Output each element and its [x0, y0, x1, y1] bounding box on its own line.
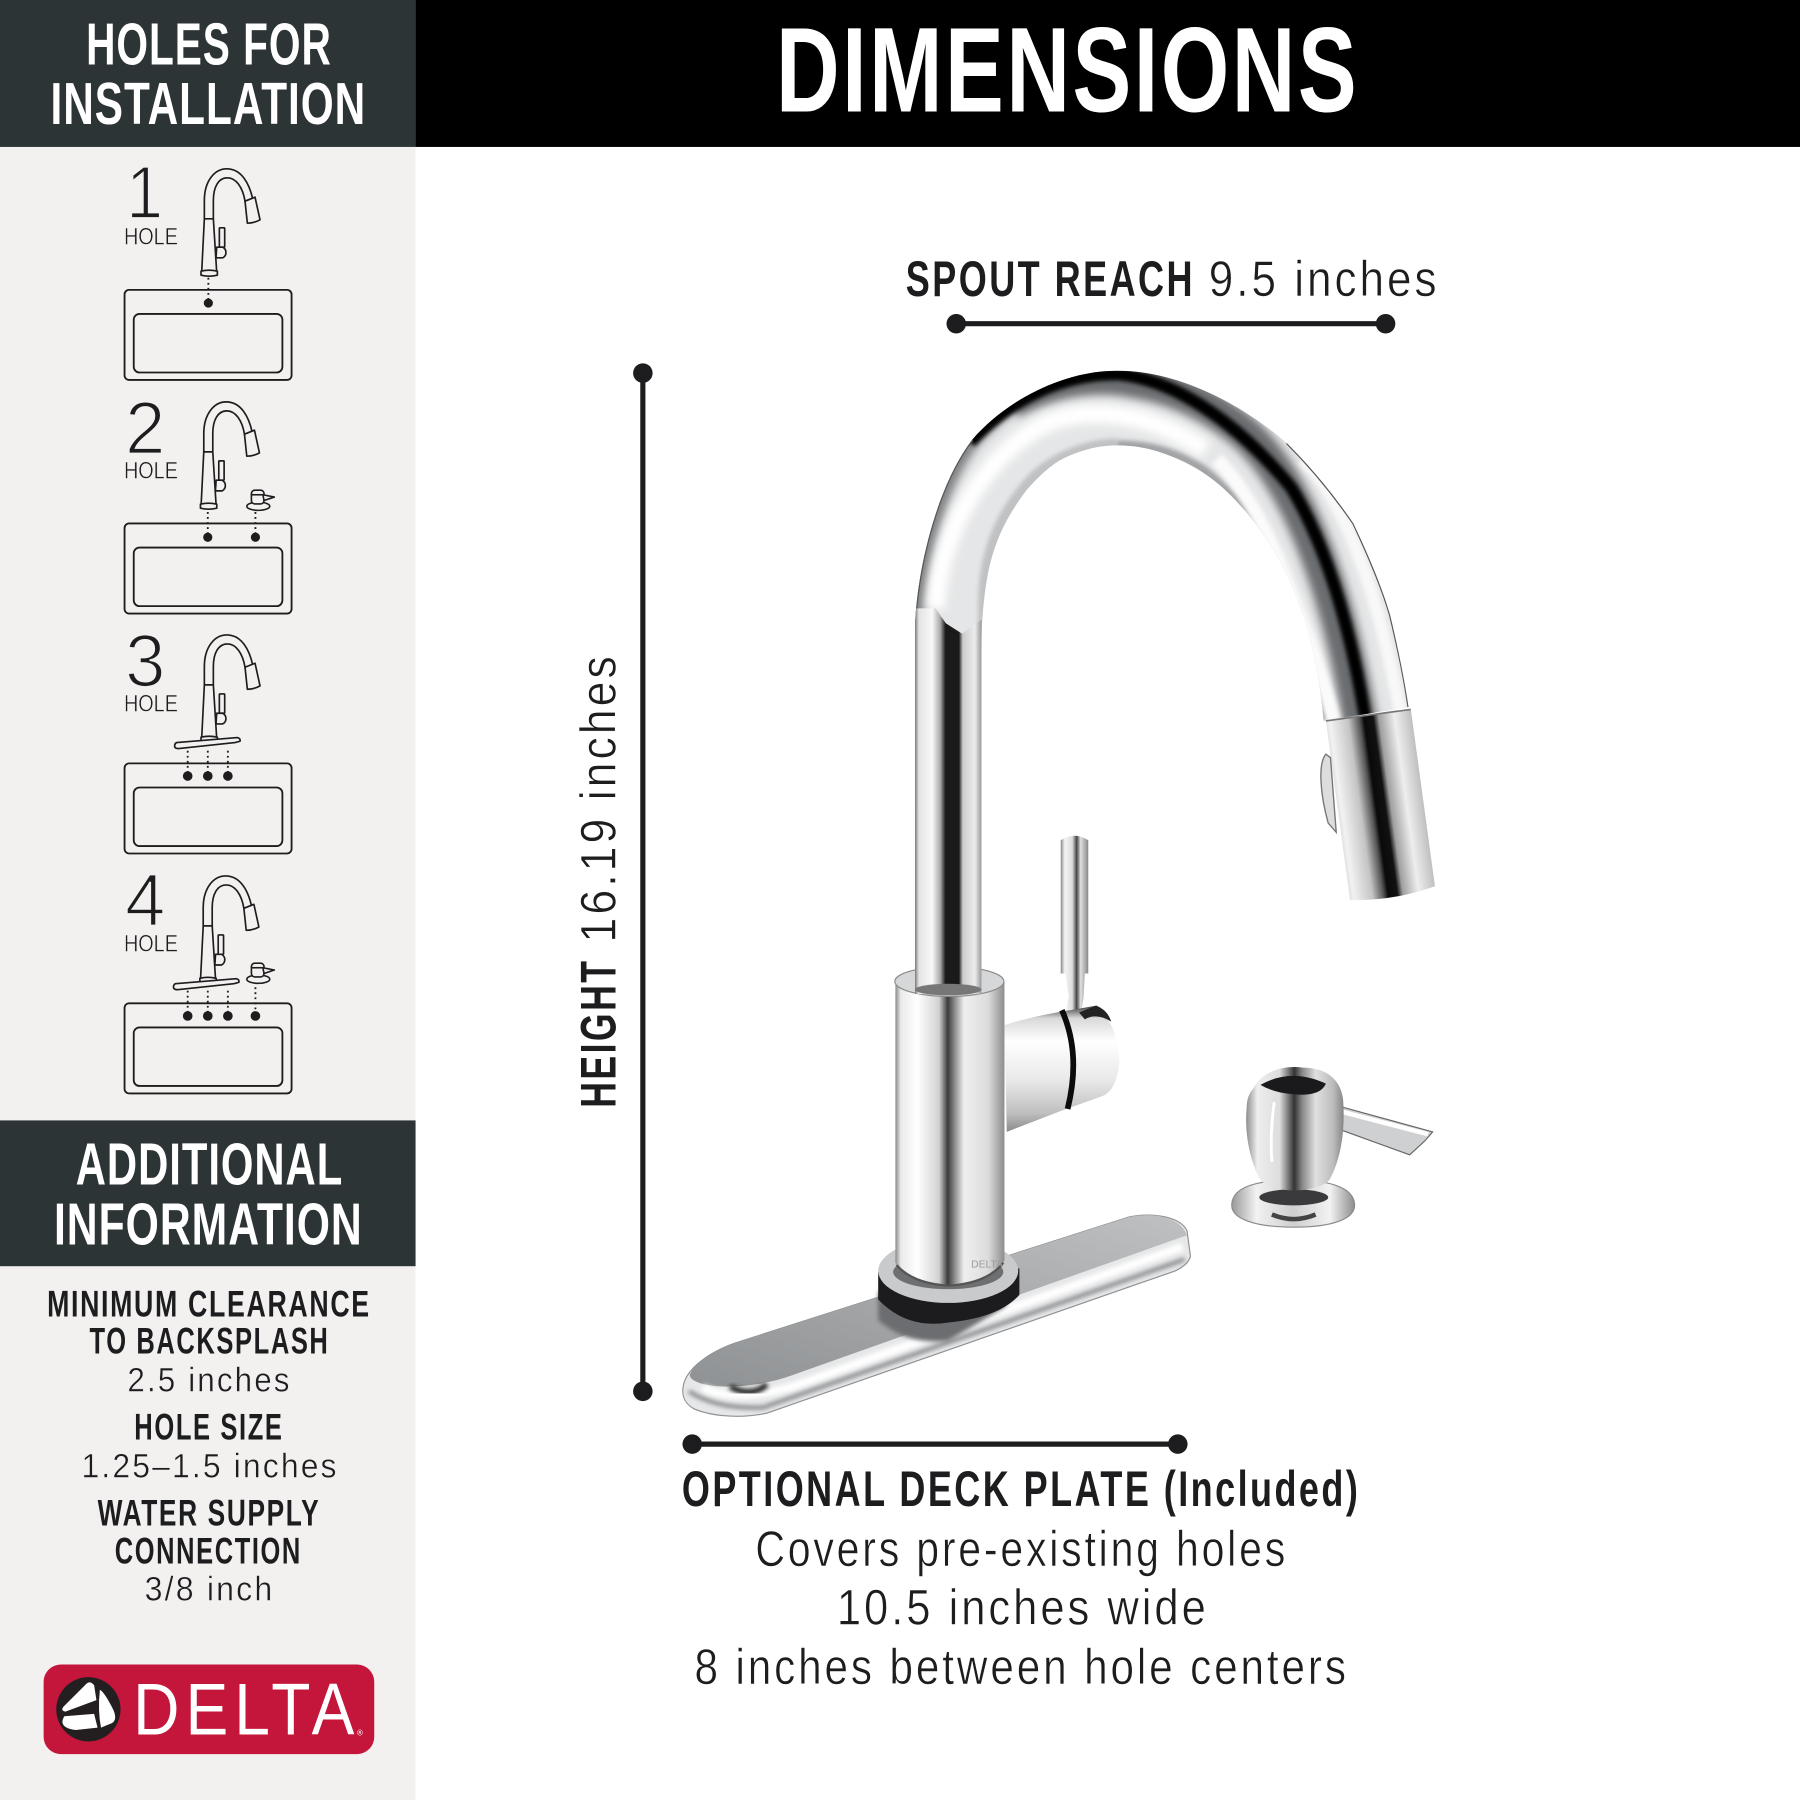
text: minimum clearance: 2.5 inches — [127, 1361, 292, 1399]
text: hole size — [82, 1407, 339, 1485]
logo: delta: DELTA — [133, 1668, 360, 1751]
diagram: 2 hole — [124, 385, 292, 614]
dimension: spout reach: SPOUT REACH — [906, 250, 1195, 307]
text: water supply connection — [98, 1493, 320, 1608]
diagram: 1 hole — [124, 150, 292, 380]
photo: chrome faucet body — [895, 967, 1004, 1286]
text: optional deck plate — [682, 1460, 1360, 1695]
dimension: height: 16.19 inches — [569, 653, 626, 942]
heading: holes for installation — [0, 0, 416, 147]
text: optional deck plate: Covers pre-existing holes — [755, 1520, 1288, 1577]
photo: chrome spout neck — [907, 356, 1418, 999]
diagram: 3 hole: 3 — [125, 618, 165, 702]
photo: spout neck base — [915, 984, 982, 995]
heading: holes for installation: HOLES FOR — [86, 10, 332, 77]
diagram: 4 hole: 4 — [125, 857, 165, 941]
diagram: 3 hole: HOLE — [124, 691, 178, 718]
dimension: height — [569, 363, 653, 1401]
photo: chrome deck plate — [683, 1215, 1190, 1416]
panel: sidebar — [0, 0, 416, 1800]
title: dimensions: DIMENSIONS — [776, 2, 1359, 137]
diagram: 4 hole: HOLE — [124, 931, 178, 958]
header bar: dimensions — [416, 0, 1800, 147]
diagram: 2 hole: 2 — [125, 385, 165, 469]
heading: additional information — [0, 1120, 416, 1266]
photo: pull-down spray head — [1321, 709, 1435, 900]
diagram: 1 hole: HOLE — [124, 224, 178, 251]
photo: lever handle — [1004, 836, 1119, 1132]
text: water supply connection: CONNECTION — [115, 1531, 302, 1572]
text: minimum clearance: MINIMUM CLEARANCE — [47, 1284, 371, 1325]
text: hole size: 1.25–1.5 inches — [82, 1447, 339, 1485]
text: minimum clearance — [47, 1284, 371, 1399]
text: water supply connection: 3/8 inch — [145, 1570, 274, 1608]
heading: holes for installation: INSTALLATION — [51, 70, 366, 137]
diagram: 4 hole — [124, 857, 292, 1093]
diagram: 3 hole — [124, 618, 292, 854]
heading: additional information: INFORMATION — [54, 1190, 363, 1257]
text: water supply connection: WATER SUPPLY — [98, 1493, 320, 1534]
photo: chrome faucet base ring — [878, 1239, 1019, 1324]
photo: chrome faucet body: DELTA — [971, 1259, 1003, 1270]
logo: delta: ® — [357, 1729, 363, 1738]
dimension: deck plate — [682, 1434, 1188, 1454]
dimension: height: HEIGHT — [569, 959, 626, 1108]
diagram: 1 hole: 1 — [126, 150, 163, 234]
heading: additional information: ADDITIONAL — [76, 1131, 343, 1198]
dimension: spout reach — [906, 250, 1440, 333]
text: optional deck plate: OPTIONAL DECK PLATE (Included) — [682, 1460, 1360, 1517]
text: optional deck plate: 8 inches between hole centers — [695, 1638, 1349, 1695]
dimension: spout reach: 9.5 inches — [1209, 250, 1440, 307]
logo: delta — [44, 1665, 374, 1754]
diagram: 2 hole: HOLE — [124, 458, 178, 485]
text: hole size: HOLE SIZE — [134, 1407, 284, 1448]
photo: soap dispenser — [1232, 1067, 1433, 1227]
text: optional deck plate: 10.5 inches wide — [837, 1578, 1209, 1635]
text: minimum clearance: TO BACKSPLASH — [90, 1320, 329, 1361]
